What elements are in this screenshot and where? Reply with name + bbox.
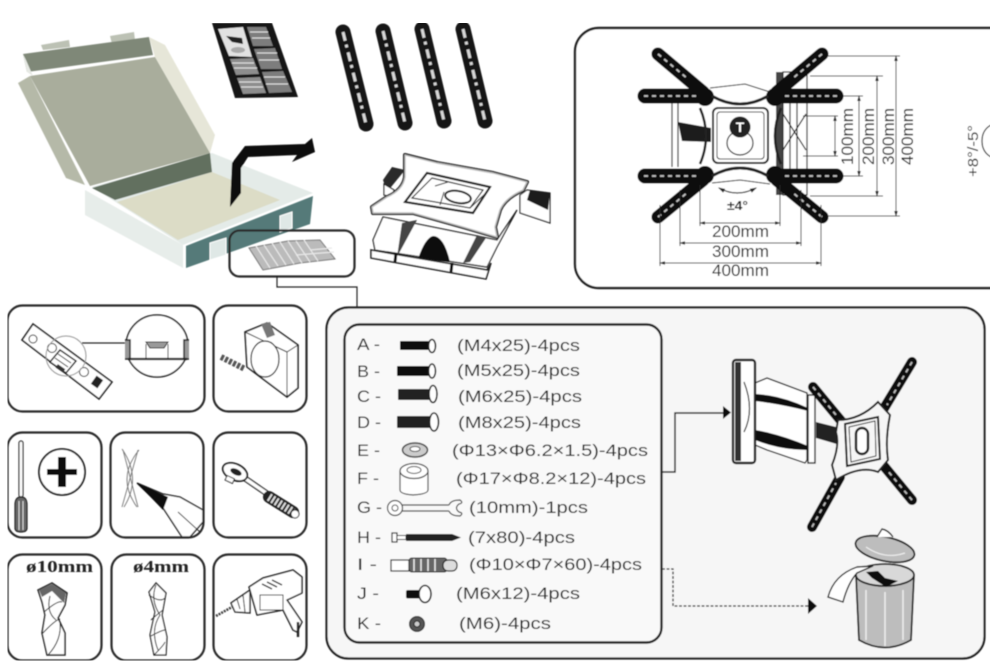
row C: (M6x25)-4pcs: [458, 387, 582, 406]
row B: [357, 361, 580, 381]
central plate: [700, 96, 781, 176]
illustration: assembled TV bracket plate: [371, 155, 550, 279]
row D: (M8x25)-4pcs: [458, 413, 581, 432]
panel: pencil marking: [110, 432, 204, 538]
panel: VESA dimensions: [575, 28, 990, 288]
row B: B -: [357, 362, 380, 381]
vertical dimension lines: 100mm: [838, 108, 857, 165]
vertical dimension lines: 300mm: [879, 108, 898, 165]
row B: (M5x25)-4pcs: [457, 361, 580, 380]
illustration: instruction manual: [212, 23, 298, 98]
row H: H -: [357, 528, 381, 547]
row C: C -: [357, 387, 381, 406]
illustration: full motion mount: [733, 360, 912, 527]
horizontal dimension lines: 200mm: [712, 222, 769, 241]
illustration: four mounting arm strips: [343, 29, 485, 124]
row D: [357, 413, 581, 432]
connector: bag to parts list: [277, 276, 357, 324]
row I: I -: [357, 555, 377, 574]
panel: ratchet wrench: [214, 432, 306, 538]
panel: tape measure tool: [214, 306, 306, 412]
row A: A -: [357, 335, 380, 354]
panel: phillips screwdriver: [8, 432, 102, 538]
row I: (Φ10×Φ7×60)-4pcs: [469, 555, 642, 574]
row A: [357, 335, 580, 355]
row I: [357, 555, 642, 574]
row K: [357, 614, 551, 633]
row E: (Φ13×Φ6.2×1.5)-4pcs: [452, 441, 648, 460]
arrow: parts used on assembled mount: [662, 406, 731, 472]
row D: D -: [357, 413, 381, 432]
tilt arc: ±4°: [727, 198, 748, 213]
panel: 4mm drill bit: ø4mm: [133, 557, 189, 576]
horizontal dimension lines: 400mm: [712, 261, 769, 280]
row F: (Φ17×Φ8.2×12)-4pcs: [456, 469, 646, 488]
vertical dimension lines: 200mm: [859, 108, 878, 165]
horizontal dimension lines: 300mm: [712, 242, 769, 261]
panel: parts list: [344, 324, 662, 642]
arrow: leftover parts to bin: [662, 569, 817, 614]
mount body behind arms: [672, 72, 807, 195]
tilt arc: [719, 188, 756, 213]
row C: [357, 386, 582, 406]
row G: (10mm)-1pcs: [469, 498, 588, 517]
panel: spirit level tool: [8, 306, 204, 412]
panel: power drill: [214, 554, 306, 660]
callout: hardware bag: [230, 230, 354, 276]
panel: 4mm drill bit: [112, 554, 204, 660]
vertical dimension lines: 400mm: [898, 108, 917, 165]
row G: G -: [357, 498, 382, 517]
row F: [357, 464, 646, 495]
row J: (M6x12)-4pcs: [456, 584, 580, 603]
row K: (M6)-4pcs: [459, 614, 551, 633]
illustration: open carton box: [18, 32, 313, 268]
horizontal dimension lines: [660, 185, 821, 280]
row A: (M4x25)-4pcs: [457, 336, 580, 355]
row K: K -: [357, 614, 381, 633]
row J: [357, 584, 580, 603]
arrow: lift out of the box: [230, 138, 315, 207]
illustration: trash bin: [828, 529, 917, 648]
row E: E -: [357, 441, 380, 460]
central plate: T: [736, 119, 745, 135]
row J: J -: [357, 584, 379, 603]
panel: hardware and assembly: [326, 308, 984, 658]
panel: 10mm masonry bit: [8, 554, 102, 660]
tilt label: +8°/-5°: [965, 125, 982, 177]
adjustable arms: [644, 54, 837, 217]
row F: F -: [357, 469, 379, 488]
row H: (7x80)-4pcs: [468, 528, 575, 547]
vertical dimension lines: [803, 56, 917, 216]
row H: [357, 528, 575, 547]
row G: [357, 498, 588, 517]
row E: [357, 441, 648, 460]
tilt label: [965, 125, 990, 177]
panel: 10mm masonry bit: ø10mm: [26, 557, 93, 576]
